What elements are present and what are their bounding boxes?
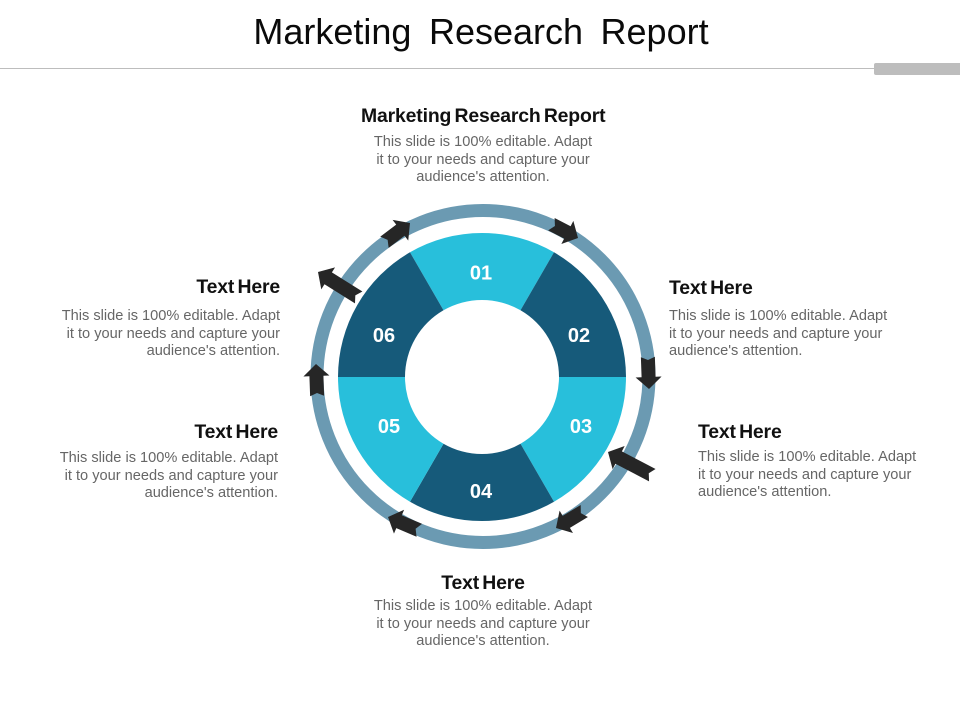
text block: lower right: audience's attention.: [698, 484, 831, 500]
text block: top: Marketing Research Report: [361, 105, 605, 127]
text block: top: This slide is 100% editable. Adapt: [374, 134, 592, 150]
text block: upper left: it to your needs and capture your: [67, 326, 280, 342]
segment 03: 03: [570, 416, 592, 438]
outer ring: [317, 210, 649, 542]
text block: lower right: [698, 421, 916, 500]
segment 05: 05: [378, 416, 400, 438]
arrow 2: [635, 357, 662, 389]
text block: bottom: This slide is 100% editable. Adapt: [374, 598, 592, 614]
arrow 8: [377, 213, 418, 253]
text block: bottom: [374, 572, 592, 649]
arrow 1: [545, 213, 584, 250]
arrow 5: [383, 505, 424, 542]
text block: upper right: [669, 277, 888, 359]
arrow 4: [549, 500, 591, 539]
segment 05: [338, 377, 444, 502]
arrow 7: [311, 261, 366, 308]
text block: lower left: [60, 421, 278, 501]
text block: lower left: This slide is 100% editable. Adapt: [60, 450, 278, 466]
segment 02: [520, 252, 626, 377]
text block: top: [361, 105, 606, 185]
text block: lower left: it to your needs and capture your: [65, 468, 278, 484]
text block: top: audience's attention.: [416, 169, 550, 185]
segment 01: 01: [470, 262, 492, 284]
segment 02: 02: [568, 325, 590, 347]
segment 04: 04: [470, 481, 493, 503]
text block: upper left: This slide is 100% editable. Adapt: [62, 308, 280, 324]
text block: lower left: Text Here: [194, 421, 278, 443]
text block: upper right: audience's attention.: [669, 343, 802, 359]
segment 03: [520, 377, 626, 502]
text block: upper left: audience's attention.: [147, 343, 280, 359]
text block: lower left: audience's attention.: [145, 485, 278, 501]
text block: bottom: it to your needs and capture your: [376, 616, 590, 632]
text block: lower right: Text Here: [698, 421, 782, 443]
text block: lower right: it to your needs and capture your: [698, 467, 911, 483]
text block: upper right: it to your needs and capture your: [669, 326, 882, 342]
text block: upper right: Text Here: [669, 277, 753, 299]
text block: bottom: audience's attention.: [416, 633, 550, 649]
text block: upper left: [62, 276, 280, 359]
text block: upper left: Text Here: [196, 276, 280, 298]
segment 06: [338, 252, 444, 377]
header accent bar: [874, 63, 960, 75]
text block: lower right: This slide is 100% editable. Adapt: [698, 449, 916, 465]
arrow 3: [602, 440, 658, 487]
header rule: [0, 68, 874, 69]
segment 06: 06: [373, 325, 395, 347]
segment 01: [410, 233, 554, 310]
text block: upper right: This slide is 100% editable. Adapt: [669, 308, 887, 324]
title: Marketing Research Report: [253, 11, 709, 52]
arrow 6: [303, 364, 330, 396]
text block: top: it to your needs and capture your: [376, 152, 590, 168]
segment 04: [410, 444, 554, 521]
text block: bottom: Text Here: [441, 572, 525, 594]
